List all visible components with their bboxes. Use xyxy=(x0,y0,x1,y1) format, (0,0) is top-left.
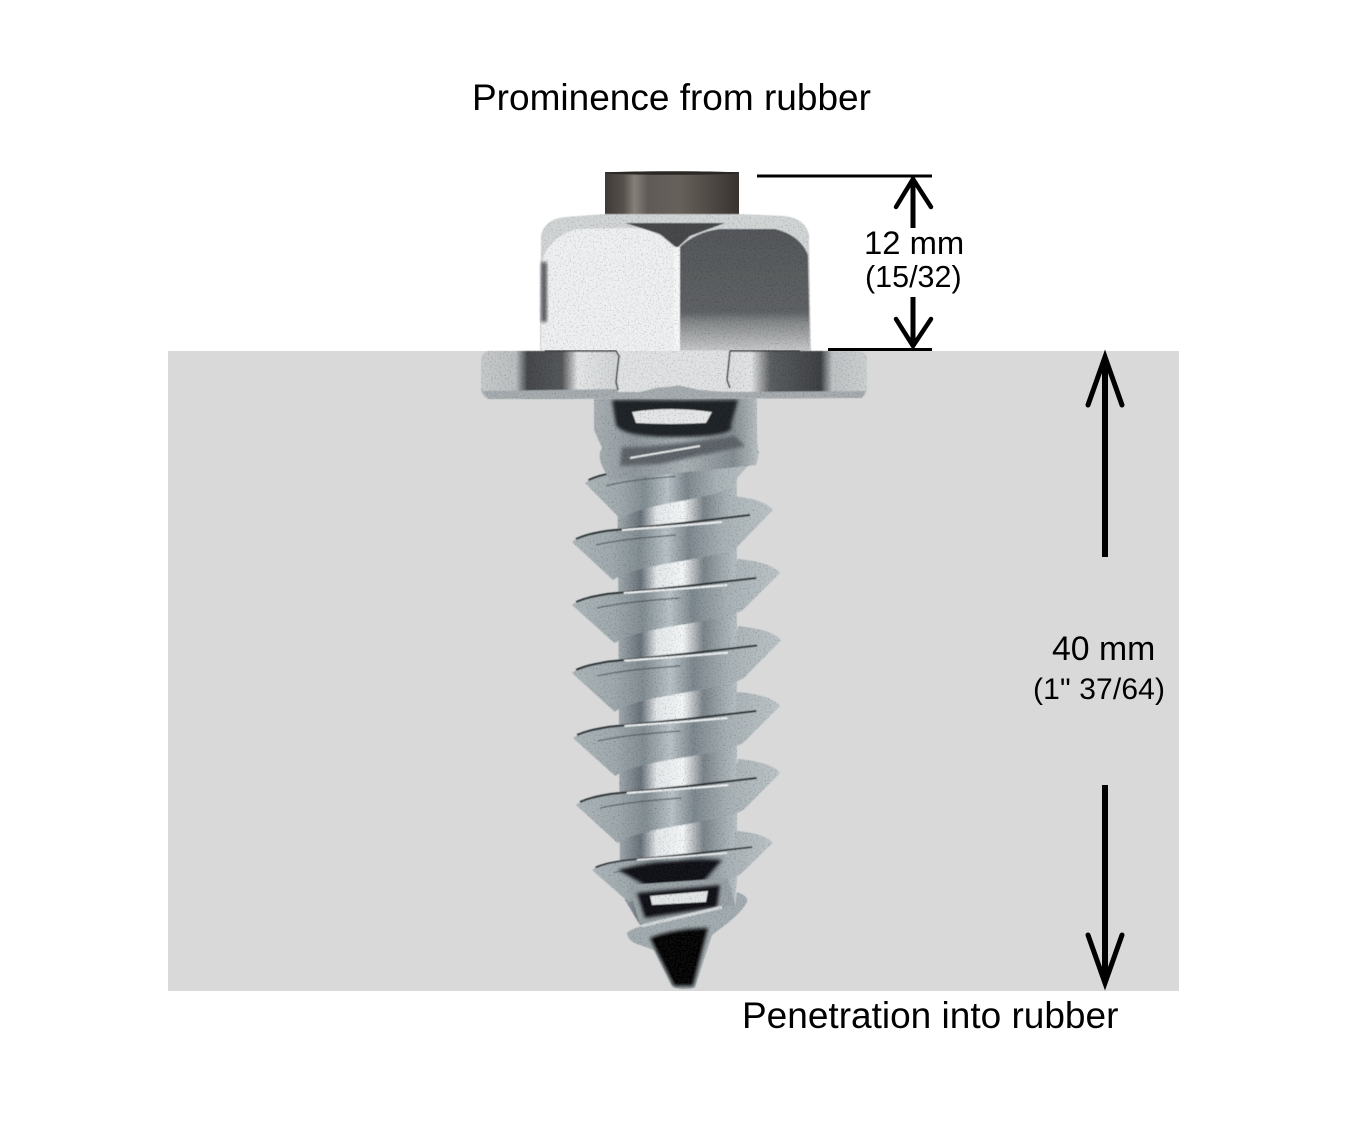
40 mm dimension xyxy=(1033,357,1165,983)
lower thread bright band xyxy=(650,891,708,905)
hex head body xyxy=(540,214,811,351)
flange lower rim xyxy=(482,384,866,399)
label 12 mm: 12 mm xyxy=(864,224,964,261)
lower thread dark patch xyxy=(618,859,722,888)
hex top notch xyxy=(625,223,725,248)
point thread crest xyxy=(642,907,722,926)
tip black centre xyxy=(650,928,708,986)
long arrow up xyxy=(1088,357,1122,557)
neck dark band xyxy=(612,400,738,437)
hex centre edge xyxy=(674,247,680,351)
arrow down xyxy=(896,297,931,346)
threads xyxy=(572,439,781,902)
lower band core fill xyxy=(628,878,735,925)
carbide pin xyxy=(605,171,739,215)
hex left face xyxy=(541,228,674,351)
lower thread dark segment xyxy=(637,885,720,918)
hex head xyxy=(540,214,811,351)
neck bright band xyxy=(632,409,712,424)
neck highlight xyxy=(630,446,700,458)
hex base xyxy=(618,351,727,392)
flange washer xyxy=(481,351,867,399)
arrow up xyxy=(896,179,931,228)
caption: penetration into rubber: Penetration into rubber xyxy=(742,995,1118,1036)
label 40 mm: 40 mm xyxy=(1052,630,1155,668)
screw core xyxy=(617,410,737,925)
label 15/32: (15/32) xyxy=(865,260,962,294)
heading: prominence from rubber: Prominence from rubber xyxy=(472,77,871,118)
neck xyxy=(594,398,758,480)
point thread and tip xyxy=(627,892,747,989)
bottom reference line xyxy=(828,348,932,351)
stud illustration xyxy=(481,171,867,989)
neck streaks xyxy=(620,436,745,466)
hex right face xyxy=(679,229,810,351)
left face shadow xyxy=(541,262,547,322)
flange shadow line xyxy=(545,351,800,390)
12 mm dimension xyxy=(757,176,964,350)
top reference line xyxy=(757,174,932,178)
long arrow down xyxy=(1088,785,1122,983)
screw shank xyxy=(572,398,781,989)
rubber cross-section panel xyxy=(168,351,1179,991)
label 1 inch 37/64: (1" 37/64) xyxy=(1033,673,1165,706)
